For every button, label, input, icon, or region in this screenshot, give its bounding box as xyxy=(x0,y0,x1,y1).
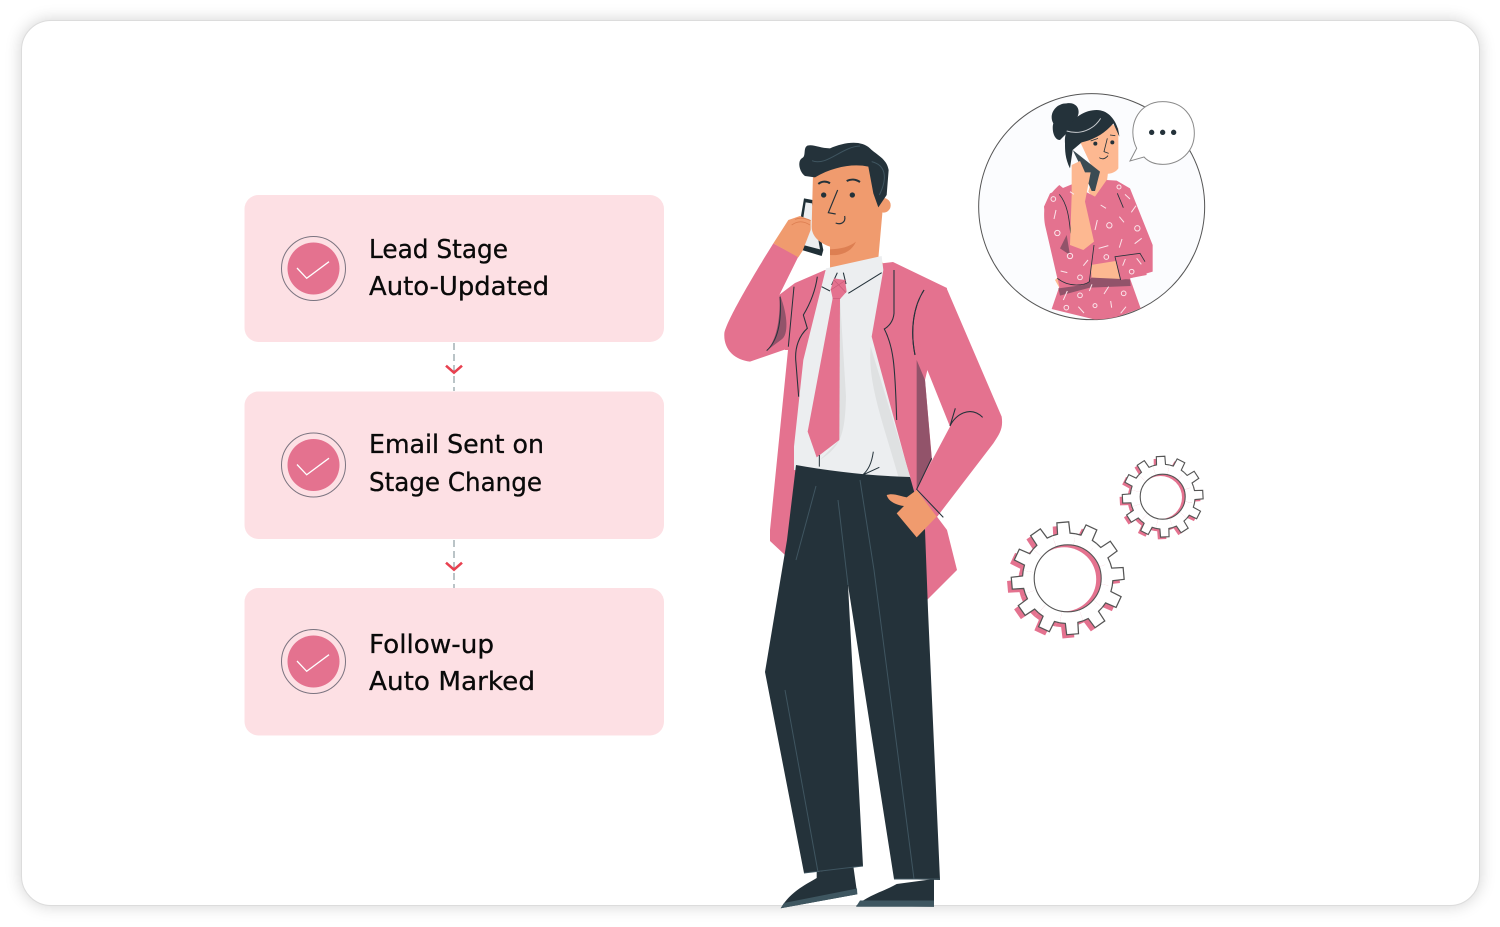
man: lapels xyxy=(796,270,924,420)
card: Lead Stage Auto-Updated xyxy=(244,195,664,342)
illustration: woman in phone circle xyxy=(979,94,1205,322)
man: hair xyxy=(799,143,889,207)
man: phone xyxy=(796,198,823,256)
woman: head xyxy=(1080,124,1118,174)
man: raised arm xyxy=(724,216,811,362)
arrow: card 1 to card 2 xyxy=(446,343,462,391)
woman: midriff arm xyxy=(1091,261,1120,280)
icon: check badge 1 xyxy=(282,236,346,300)
text: card 3 label: Auto Marked xyxy=(369,667,535,697)
icon: large gear xyxy=(1003,517,1129,643)
card: Follow-up Auto Marked xyxy=(244,588,664,736)
man: collar xyxy=(822,273,882,293)
woman: sleeve folded xyxy=(1120,274,1147,280)
woman: hand fold xyxy=(1055,278,1060,288)
man: lower arm sleeve xyxy=(915,288,1002,517)
illustration canvas xyxy=(244,93,1206,908)
woman: hair xyxy=(1065,110,1119,168)
text: card 3 label xyxy=(369,630,535,697)
woman: dress shadow xyxy=(1058,278,1131,296)
card: Email Sent on Stage Change xyxy=(244,392,664,539)
text: card 1 label: Auto-Updated xyxy=(369,272,549,302)
arrow: card 2 to card 3 xyxy=(446,540,462,588)
man: shirt shadow xyxy=(870,347,911,478)
woman: phone body xyxy=(1073,150,1100,191)
text: card 2 label: Email Sent on xyxy=(369,430,544,460)
text: card 3 label: Follow-up xyxy=(369,630,494,660)
woman: face details xyxy=(1091,135,1115,159)
man: neck and face xyxy=(812,157,891,273)
icon: check badge 3 xyxy=(282,630,346,694)
woman: dress pattern xyxy=(1054,192,1142,313)
woman: arm and hand xyxy=(1070,161,1094,250)
illustration: man on phone xyxy=(724,143,1002,908)
man: tie xyxy=(808,278,847,460)
man: shirt folds xyxy=(819,452,879,475)
woman: neck xyxy=(1088,172,1108,196)
text: card 1 label xyxy=(369,235,549,302)
man: hand in pocket xyxy=(887,490,937,537)
text: card 2 label xyxy=(369,430,544,498)
icon: check badge 2 xyxy=(282,433,346,497)
woman: dress xyxy=(1044,180,1153,322)
text: card 1 label: Lead Stage xyxy=(369,235,508,265)
man: shoes xyxy=(781,866,934,908)
woman: circle background xyxy=(979,94,1205,320)
icon: small gear xyxy=(1118,454,1205,541)
man: trouser creases xyxy=(785,480,940,879)
man: jacket xyxy=(770,262,957,602)
man: side shadow xyxy=(917,360,932,488)
woman: raised sleeve xyxy=(1044,185,1094,285)
man: shirt xyxy=(794,256,911,480)
speech bubble xyxy=(1130,102,1194,164)
woman: hair bun xyxy=(1052,103,1079,140)
man: trousers xyxy=(765,465,940,880)
man: sleeve lines xyxy=(913,290,983,517)
text: card 2 label: Stage Change xyxy=(369,468,542,498)
